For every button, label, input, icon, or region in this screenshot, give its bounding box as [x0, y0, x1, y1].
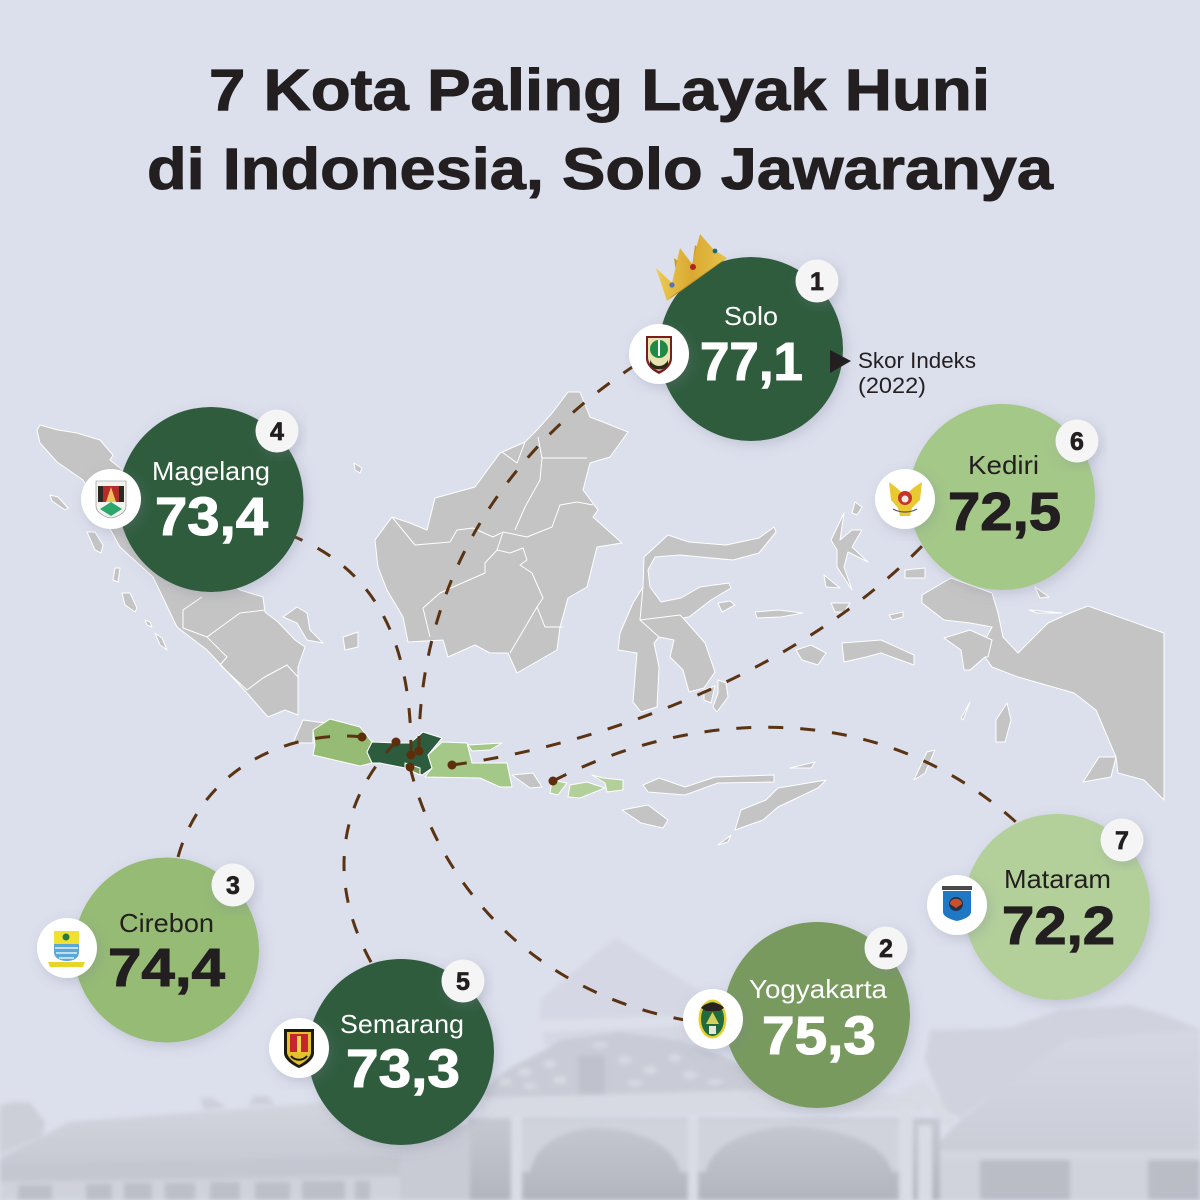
rank badge [256, 410, 298, 452]
rank badge: 2 [879, 935, 893, 963]
rank badge [212, 864, 254, 906]
legend text: Skor Indeks [858, 348, 976, 373]
dashed connector routes [178, 362, 1017, 1020]
rank badge [864, 926, 908, 970]
rank badge: 3 [226, 872, 240, 900]
city: Semarang [269, 959, 494, 1145]
lattice arches [520, 1120, 900, 1172]
background photo: palace [0, 938, 1200, 1200]
score: 73,4 [155, 487, 268, 547]
route: Kediri [452, 543, 925, 765]
Papua [922, 578, 1164, 800]
Java provinces [313, 719, 623, 798]
rank badge: 6 [1070, 428, 1084, 456]
city: Magelang [81, 407, 304, 592]
Sumatra [37, 425, 362, 717]
rank badge: 7 [1115, 827, 1129, 855]
route: Magelang [295, 537, 411, 755]
East Java [425, 742, 512, 787]
route: Yogyakarta [410, 767, 685, 1020]
city: Yogyakarta [683, 922, 910, 1108]
Central Java [367, 732, 442, 775]
name: Semarang [340, 1009, 464, 1039]
rank badge [1100, 818, 1144, 862]
rank badge [442, 960, 484, 1002]
logo [683, 989, 743, 1049]
city: Kediri [875, 404, 1098, 590]
score: 77,1 [700, 332, 803, 392]
score: 72,2 [1002, 896, 1115, 956]
circle Magelang [118, 407, 304, 592]
logo [629, 324, 689, 384]
rank badge [1056, 420, 1098, 462]
name: Cirebon [119, 908, 214, 938]
circle Mataram [964, 814, 1150, 1000]
city: Cirebon [37, 858, 259, 1042]
Kalimantan [375, 392, 628, 673]
circle Solo [659, 257, 843, 441]
Lombok [550, 780, 567, 795]
icon: crown [656, 234, 727, 301]
name: Yogyakarta [749, 974, 888, 1004]
logo [875, 469, 935, 529]
route: Solo [419, 362, 640, 751]
Maluku [755, 502, 925, 665]
name: Solo [724, 301, 778, 331]
city: Solo [629, 234, 843, 441]
circle Semarang [308, 959, 494, 1145]
legend: score index: (2022) [858, 373, 926, 398]
rank badge [796, 260, 838, 302]
logo [927, 875, 987, 935]
title [147, 58, 1054, 202]
route: Mataram [553, 727, 1017, 823]
route: Semarang [344, 742, 396, 964]
West Java [313, 719, 372, 766]
Banten [293, 720, 325, 743]
map of Indonesia [37, 392, 1164, 845]
Yogyakarta region [405, 763, 420, 775]
city: Mataram [927, 814, 1150, 1000]
arrow [830, 350, 851, 373]
score: 74,4 [108, 938, 225, 998]
Sumbawa [568, 775, 623, 798]
legend: score index [830, 348, 976, 398]
route: Cirebon [178, 736, 362, 857]
city location markers [358, 732, 558, 786]
score: 72,5 [948, 482, 1061, 542]
rank badge: 4 [270, 418, 284, 446]
score: 73,3 [346, 1039, 460, 1099]
name: Magelang [152, 456, 270, 486]
Sulawesi [618, 527, 776, 712]
score: 75,3 [762, 1006, 876, 1066]
logo [269, 1018, 329, 1078]
circle Yogyakarta [724, 922, 910, 1108]
circle Cirebon [74, 858, 259, 1042]
title: di Indonesia, Solo Jawaranya [147, 137, 1054, 202]
rank badge: 1 [810, 268, 824, 296]
name: Kediri [968, 450, 1039, 480]
logo [81, 469, 141, 529]
Madura [468, 743, 502, 751]
name: Mataram [1004, 864, 1111, 894]
circle Kediri [909, 404, 1095, 590]
rank badge: 5 [456, 968, 470, 996]
logo [37, 918, 97, 978]
title: 7 Kota Paling Layak Huni [209, 58, 990, 123]
Lesser Sunda islands [512, 750, 935, 845]
